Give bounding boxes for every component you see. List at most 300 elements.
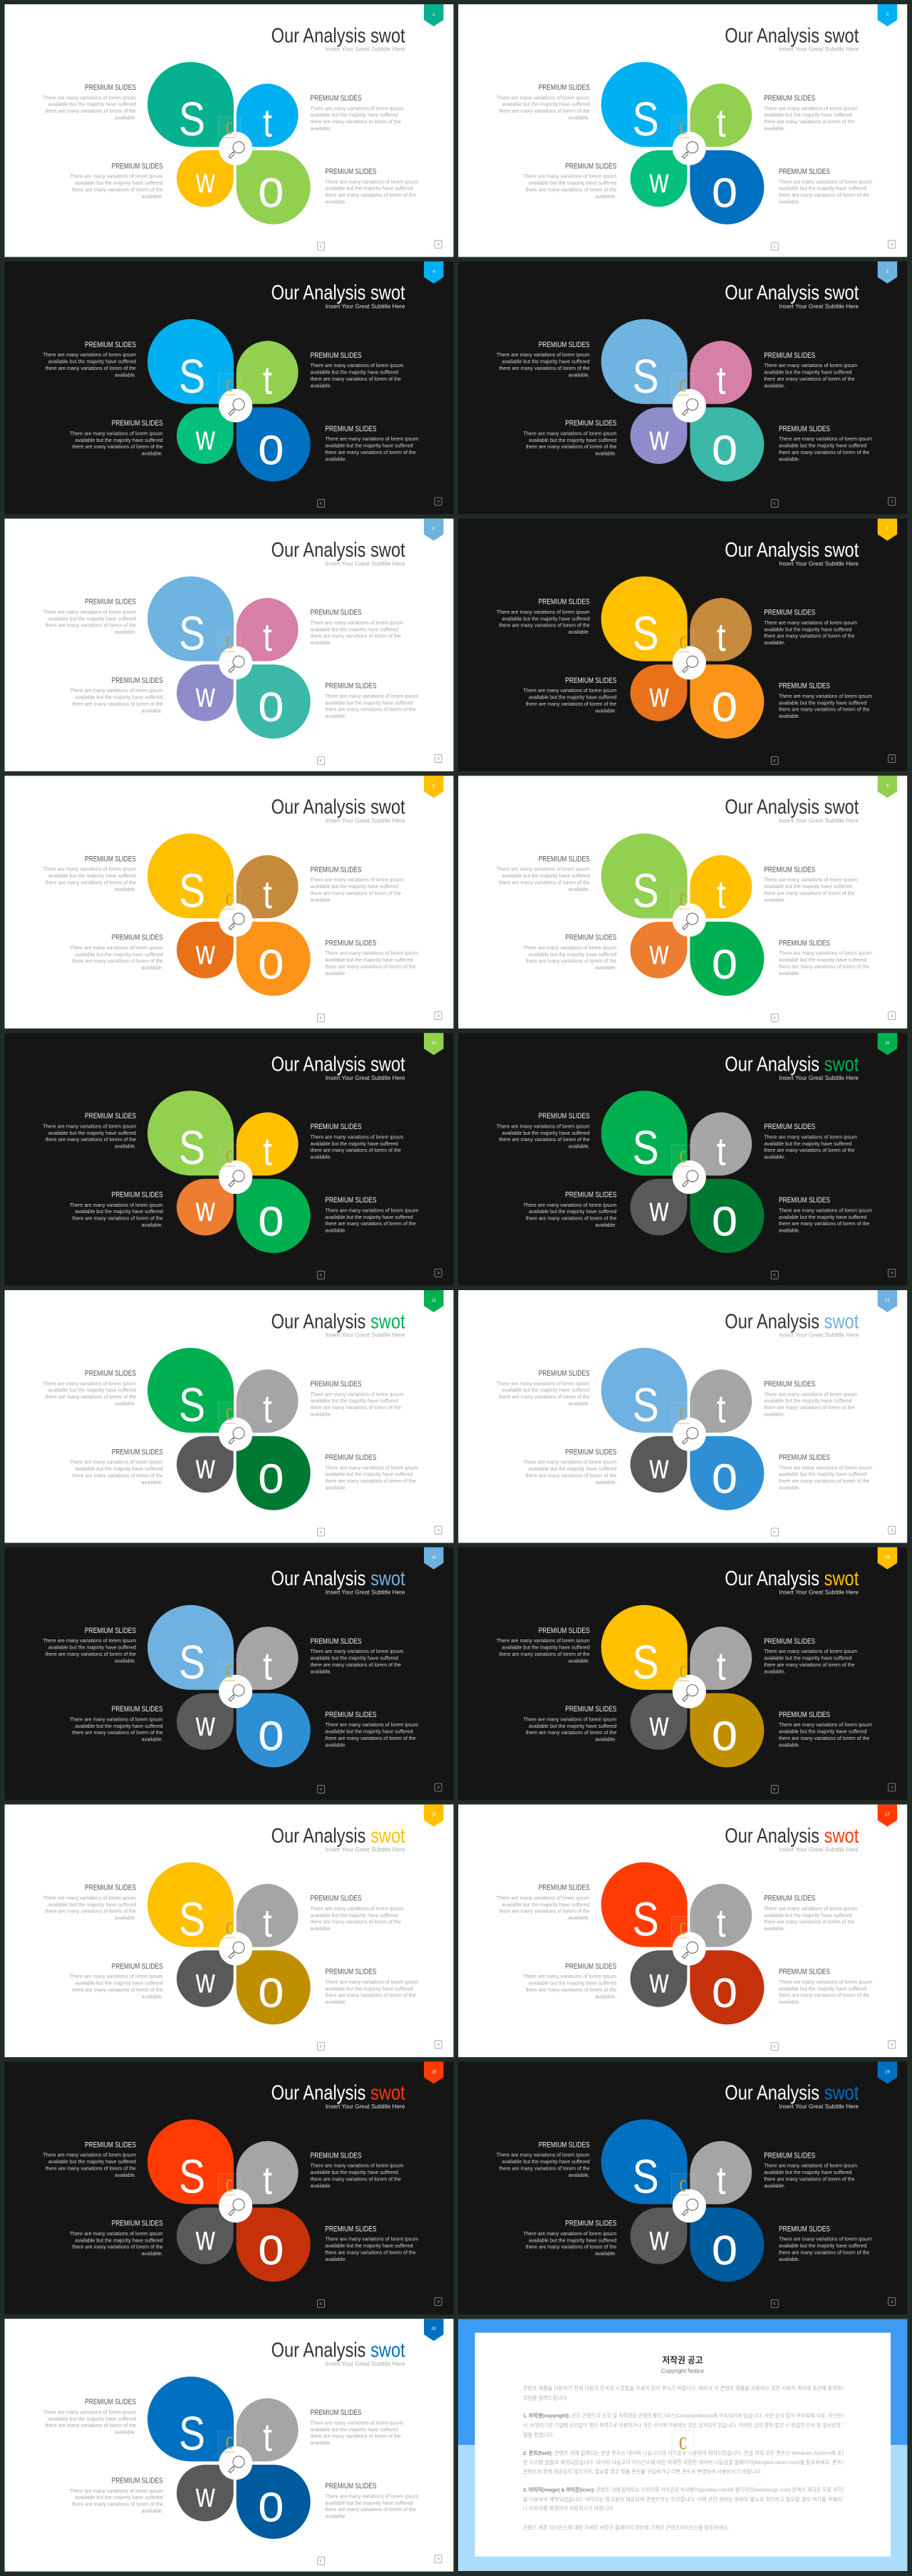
text block: top right <box>311 1637 403 1674</box>
text block: bottom right: PREMIUM SLIDES <box>325 1968 376 1977</box>
slide background <box>4 262 453 514</box>
petal t: t <box>263 100 272 145</box>
page tag: 15 <box>885 1556 890 1560</box>
text block: top left: PREMIUM SLIDES <box>85 1112 136 1120</box>
text block: bottom left: available but the majority have suffered <box>75 180 163 186</box>
text block: bottom left: there are many variations of lorem of the <box>72 187 163 192</box>
subtitle: Insert Your Great Subtitle Here <box>779 1590 859 1596</box>
text block: bottom left: There are many variations of lorem ipsum <box>523 1974 616 1979</box>
petal t <box>690 2141 752 2204</box>
text block: top left: available but the majority have suffered <box>48 359 136 364</box>
text block: bottom left <box>523 419 616 457</box>
petal w: w <box>649 163 669 200</box>
watermark <box>672 631 695 662</box>
text block: bottom right: There are many variations of lorem ipsum <box>779 179 872 185</box>
text block: top left: available. <box>569 1915 590 1921</box>
text block: bottom right: there are many variations of lorem of the <box>779 1993 869 1999</box>
nav next <box>435 755 442 763</box>
text block: bottom right <box>325 1968 418 2005</box>
watermark <box>672 2173 695 2205</box>
text block: top left: there are many variations of lorem of the <box>499 1909 590 1915</box>
text block: bottom right: available. <box>325 1485 346 1491</box>
text block: top right: available but the majority have suffered <box>311 1398 398 1404</box>
page tag: 5 <box>886 270 889 274</box>
text block: top right: available. <box>311 640 332 646</box>
text block: top left: available but the majority have suffered <box>48 616 136 622</box>
text block: top left: available but the majority have suffered <box>48 1645 136 1651</box>
petal w: w <box>649 676 669 715</box>
text block: top left: available but the majority have suffered <box>48 2159 136 2165</box>
text block: bottom right: PREMIUM SLIDES <box>779 1196 830 1205</box>
watermark: C <box>226 890 233 910</box>
page tag: 13 <box>885 1299 890 1303</box>
petal S <box>601 319 688 404</box>
text block: bottom right: PREMIUM SLIDES <box>325 939 376 947</box>
text block: bottom right: There are many variations of lorem ipsum <box>325 2237 418 2242</box>
nav previous <box>771 1271 778 1279</box>
watermark: C <box>226 1405 233 1424</box>
text block: bottom left: available. <box>142 194 163 200</box>
text block: top right: There are many variations of lorem ipsum <box>764 1649 857 1654</box>
text block: bottom left: There are many variations of lorem ipsum <box>523 2231 616 2237</box>
text block: bottom left: available but the majority have suffered <box>75 2495 163 2500</box>
subtitle: Insert Your Great Subtitle Here <box>326 46 405 53</box>
petal t <box>237 83 299 147</box>
watermark: C <box>680 119 687 138</box>
text block: bottom right <box>779 1453 872 1491</box>
petal S <box>601 1605 688 1690</box>
notice body text: 벌을 받습니다. <box>523 2431 554 2438</box>
petal w <box>177 408 234 464</box>
text block: bottom left: there are many variations of lorem of the <box>526 1987 616 1993</box>
text block: top left: There are many variations of lorem ipsum <box>43 1381 136 1386</box>
text block: top left: available. <box>115 887 136 892</box>
petal t: t <box>717 2158 726 2203</box>
text block: top left: available but the majority have suffered <box>502 873 590 879</box>
text block: top left: there are many variations of lorem of the <box>46 1137 136 1143</box>
text block: bottom left <box>70 1705 163 1743</box>
title: Our Analysis swot <box>271 2339 405 2361</box>
petal o: o <box>258 2216 284 2276</box>
text block: bottom right: there are many variations of lorem of the <box>325 2250 416 2255</box>
text block: top left <box>43 1627 136 1664</box>
center circle with magnifier <box>219 389 252 423</box>
text block: top left: PREMIUM SLIDES <box>85 341 136 349</box>
subtitle: Insert Your Great Subtitle Here <box>326 1846 405 1853</box>
text block: top left: there are many variations of lorem of the <box>46 2423 136 2428</box>
text block: bottom right: there are many variations of lorem of the <box>779 1736 869 1741</box>
petal w: w <box>649 1962 669 2001</box>
text block: top left: available but the majority have suffered <box>48 102 136 108</box>
slide background <box>4 1033 453 1286</box>
petal o: o <box>712 1445 737 1504</box>
text block: bottom right: PREMIUM SLIDES <box>779 682 830 691</box>
text block: top left: there are many variations of lorem of the <box>499 1652 590 1657</box>
page tag <box>424 1547 443 1570</box>
petal o <box>237 664 311 738</box>
petal w <box>631 664 687 721</box>
nav next <box>888 498 896 505</box>
slide background <box>458 1805 907 2057</box>
text block: top right: there are many variations of lorem of the <box>311 1148 401 1153</box>
subtitle: Insert Your Great Subtitle Here <box>326 1332 405 1339</box>
text block: top left: There are many variations of lorem ipsum <box>43 1895 136 1901</box>
text block: top right: PREMIUM SLIDES <box>311 1123 362 1131</box>
text block: bottom right: available. <box>325 713 346 719</box>
petal S: S <box>633 1379 659 1432</box>
text block: bottom left: there are many variations of lorem of the <box>526 2245 616 2250</box>
watermark: C <box>226 1920 233 1939</box>
notice body text: 3. 이미지(image) & 아이콘(icon): 콘텐츠 내에 탑재되는 이미지와 아이콘은 픽사베이(pixabay.com)와 웹디자인(webdesign.com) 등에서 제공된 무료 저작물 <box>523 2486 846 2493</box>
watermark <box>218 1659 241 1691</box>
text block: bottom left <box>70 1962 163 1999</box>
text block: top right: available. <box>764 1669 785 1674</box>
text block: bottom left: There are many variations of lorem ipsum <box>70 1716 163 1722</box>
petal w: w <box>195 1705 216 1743</box>
title: Our Analysis swot <box>725 1053 859 1076</box>
title: Our Analysis swot <box>271 24 405 47</box>
text block: bottom left: there are many variations of lorem of the <box>526 701 616 707</box>
slide 8 <box>4 776 453 1029</box>
text block: bottom right: available. <box>779 200 800 205</box>
subtitle: Insert Your Great Subtitle Here <box>779 818 859 824</box>
petal t: t <box>263 1386 272 1431</box>
text block: top left <box>497 1112 590 1150</box>
page tag: 18 <box>431 2070 437 2074</box>
text block: top left: available. <box>115 629 136 635</box>
text block: top right: There are many variations of lorem ipsum <box>764 1906 857 1912</box>
text block: bottom left: available. <box>595 965 616 971</box>
title: Our Analysis swot <box>271 1310 405 1333</box>
text block: top right: available but the majority have suffered <box>764 884 852 890</box>
text block: bottom left: available but the majority have suffered <box>529 438 616 443</box>
center circle with magnifier <box>673 903 706 937</box>
page tag <box>424 776 443 798</box>
text block: top left: There are many variations of lorem ipsum <box>497 1123 590 1129</box>
text block: bottom right: there are many variations of lorem of the <box>779 1478 869 1484</box>
slide background <box>458 4 907 257</box>
text block: bottom right <box>325 2225 418 2262</box>
text block: bottom left <box>70 1190 163 1228</box>
text block: bottom right: There are many variations of lorem ipsum <box>325 436 418 442</box>
text block: top right: there are many variations of lorem of the <box>311 2433 401 2439</box>
text block: top right: available but the majority have suffered <box>764 113 852 118</box>
petal w <box>177 2465 234 2521</box>
text block: bottom right: PREMIUM SLIDES <box>325 1196 376 1205</box>
petal w: w <box>649 1191 669 1229</box>
text block: bottom right: available but the majority have suffered <box>325 957 413 963</box>
text block: top left <box>43 2140 136 2178</box>
subtitle: Insert Your Great Subtitle Here <box>326 1590 405 1596</box>
text block: top left: available. <box>569 372 590 378</box>
text block: bottom right: available but the majority have suffered <box>779 443 866 448</box>
text block: top left: available but the majority have suffered <box>48 1130 136 1136</box>
text block: bottom right: there are many variations of lorem of the <box>779 707 869 713</box>
text block: top right: there are many variations of lorem of the <box>311 890 401 896</box>
title: Our Analysis swot <box>725 539 859 562</box>
petal t <box>690 341 752 404</box>
nav next <box>435 498 442 505</box>
center circle with magnifier <box>673 1932 706 1965</box>
text block: bottom left: there are many variations of lorem of the <box>72 2245 163 2250</box>
nav next <box>888 2298 896 2306</box>
petal w <box>177 1694 234 1750</box>
nav previous <box>318 242 325 250</box>
text block: top left: There are many variations of lorem ipsum <box>43 1638 136 1644</box>
text block: top right <box>764 865 857 903</box>
page tag: 10 <box>431 1041 437 1046</box>
text block: top left: available but the majority have suffered <box>502 1130 590 1136</box>
text block: bottom right: There are many variations of lorem ipsum <box>779 2237 872 2242</box>
nav next <box>435 2298 442 2306</box>
petal w <box>631 1436 687 1493</box>
center circle with magnifier <box>219 1932 252 1965</box>
notice background top <box>458 2319 908 2445</box>
watermark <box>672 1402 695 1433</box>
text block: top left: there are many variations of lorem of the <box>46 1909 136 1915</box>
slide background <box>4 4 453 257</box>
text block: top right: PREMIUM SLIDES <box>764 609 815 617</box>
text block: top left: there are many variations of lorem of the <box>499 1137 590 1143</box>
nav next <box>435 2041 442 2049</box>
watermark: CONTENTS <box>677 1679 689 1682</box>
text block: top left: PREMIUM SLIDES <box>85 1627 136 1635</box>
text block: bottom left: There are many variations of lorem ipsum <box>70 2488 163 2494</box>
text block: bottom left: available. <box>142 1480 163 1485</box>
text block: top right: There are many variations of lorem ipsum <box>764 105 857 111</box>
text block: bottom left: PREMIUM SLIDES <box>565 676 616 685</box>
text block: bottom right: PREMIUM SLIDES <box>779 168 830 176</box>
page tag: 14 <box>431 1556 437 1560</box>
text block: bottom left: There are many variations of lorem ipsum <box>523 1716 616 1722</box>
text block: bottom right: There are many variations of lorem ipsum <box>325 1722 418 1728</box>
text block: top right <box>311 1123 403 1160</box>
text block: bottom left: available but the majority have suffered <box>75 438 163 443</box>
panel: copyright notice <box>458 2319 908 2571</box>
slide background <box>458 776 907 1029</box>
watermark <box>672 1145 695 1176</box>
text block: bottom right <box>779 168 872 205</box>
text block: bottom right: PREMIUM SLIDES <box>779 1453 830 1462</box>
text block: bottom right: PREMIUM SLIDES <box>779 425 830 433</box>
text block: top left: There are many variations of lorem ipsum <box>43 867 136 872</box>
text block: bottom left: PREMIUM SLIDES <box>112 2220 163 2228</box>
text block: top right: available but the majority have suffered <box>311 2427 398 2433</box>
text block: top left: available. <box>569 1144 590 1150</box>
text block: bottom left: PREMIUM SLIDES <box>565 419 616 428</box>
petal o: o <box>258 1187 284 1247</box>
text block: bottom left: There are many variations of lorem ipsum <box>523 431 616 436</box>
text block: bottom left: There are many variations of lorem ipsum <box>70 1202 163 1208</box>
watermark: CONTENTS <box>677 2193 689 2196</box>
petal S: S <box>633 1636 659 1689</box>
text block: bottom left: available but the majority have suffered <box>75 1466 163 1472</box>
slide 16 <box>4 1805 453 2057</box>
text block: top right: There are many variations of lorem ipsum <box>764 1391 857 1397</box>
text block: top right: there are many variations of lorem of the <box>311 2176 401 2182</box>
title: Our Analysis swot <box>271 2082 405 2105</box>
nav previous <box>318 2557 325 2565</box>
title: Our Analysis swot <box>725 2082 859 2105</box>
text block: bottom left: available. <box>595 1737 616 1743</box>
petal o <box>237 1179 311 1253</box>
slide 7 <box>458 519 907 771</box>
title: Our Analysis swot <box>271 539 405 562</box>
text block: bottom left: PREMIUM SLIDES <box>112 162 163 170</box>
petal t: t <box>717 357 726 402</box>
text block: top right: There are many variations of lorem ipsum <box>764 620 857 626</box>
text block: bottom left <box>523 2220 616 2257</box>
text block: top left: There are many variations of lorem ipsum <box>43 609 136 615</box>
text block: bottom left <box>523 162 616 200</box>
text block: bottom left: There are many variations of lorem ipsum <box>70 431 163 436</box>
center circle with magnifier <box>673 646 706 679</box>
text block: bottom left: There are many variations of lorem ipsum <box>70 688 163 694</box>
text block: top right <box>764 1895 857 1932</box>
petal S: S <box>179 1379 205 1432</box>
text block: top left <box>497 855 590 892</box>
text block: bottom left: available. <box>142 2251 163 2257</box>
watermark <box>218 631 241 662</box>
watermark: CONTENTS <box>677 907 689 910</box>
subtitle: Insert Your Great Subtitle Here <box>326 303 405 309</box>
text block: bottom left: available. <box>595 194 616 200</box>
text block: top right: PREMIUM SLIDES <box>311 1637 362 1646</box>
petal w: w <box>195 419 216 458</box>
title: Our Analysis swot <box>725 796 859 819</box>
text block: top left: There are many variations of lorem ipsum <box>497 2153 590 2158</box>
title: Our Analysis swot <box>271 282 405 304</box>
petal w <box>177 1179 234 1235</box>
text block: bottom left: available. <box>142 1222 163 1228</box>
petal w: w <box>195 676 216 715</box>
text block: top left: available. <box>569 2173 590 2178</box>
text block: bottom left: there are many variations of lorem of the <box>72 1215 163 1221</box>
watermark: CONTENTS <box>224 1937 235 1939</box>
watermark: CONTENTS <box>224 2451 235 2453</box>
petal S <box>601 1863 688 1947</box>
watermark: CONTENTS <box>677 393 689 396</box>
notice body text: 콘텐츠와 함께 제공되지 않으므로, 필요할 경우 정품 폰트를 구입하거나 다른 폰트로 변경하여 사용하시기 바랍니다. <box>523 2468 762 2475</box>
petal o <box>237 2207 311 2282</box>
petal t <box>237 1627 299 1690</box>
watermark <box>672 116 695 148</box>
petal o: o <box>712 1187 737 1247</box>
petal w: w <box>649 2220 669 2258</box>
watermark: CONTENTS <box>677 1165 689 1168</box>
petal o <box>690 1694 764 1768</box>
text block: bottom left: available but the majority have suffered <box>529 1209 616 1215</box>
text block: top left: there are many variations of lorem of the <box>46 880 136 885</box>
text block: bottom right <box>325 1711 418 1748</box>
text block: top left: available. <box>569 1401 590 1407</box>
petal o <box>690 150 764 225</box>
nav previous <box>771 1786 778 1793</box>
text block: top right: There are many variations of lorem ipsum <box>311 877 403 883</box>
text block: top right: PREMIUM SLIDES <box>764 1123 815 1131</box>
petal w: w <box>195 2477 216 2515</box>
petal o <box>690 2207 764 2282</box>
petal S: S <box>633 607 659 661</box>
text block: top left <box>43 1112 136 1150</box>
text block: bottom right: PREMIUM SLIDES <box>779 2225 830 2233</box>
slide 11 <box>458 1033 907 1286</box>
text block: top right: there are many variations of lorem of the <box>764 376 855 382</box>
text block: bottom left <box>523 934 616 971</box>
text block: top right: available. <box>311 383 332 388</box>
petal o: o <box>712 673 737 733</box>
petal o <box>690 922 764 996</box>
text block: top left <box>43 1884 136 1921</box>
title: Our Analysis swot <box>725 282 859 304</box>
text block: top right: available but the majority have suffered <box>764 1398 852 1404</box>
slide background <box>458 1033 907 1286</box>
page tag <box>878 2061 897 2083</box>
slide 2 <box>4 4 453 257</box>
petal o: o <box>258 1959 284 2019</box>
slide 14 <box>4 1547 453 1800</box>
title: Our Analysis swot <box>725 1567 859 1590</box>
text block: top right: PREMIUM SLIDES <box>311 1895 362 1903</box>
nav previous <box>771 2299 778 2307</box>
text block: top left: there are many variations of lorem of the <box>499 880 590 885</box>
text block: bottom left: there are many variations of lorem of the <box>72 2501 163 2507</box>
watermark: C <box>226 1662 233 1681</box>
text block: bottom left: PREMIUM SLIDES <box>565 2220 616 2228</box>
text block: bottom right: there are many variations of lorem of the <box>779 192 869 198</box>
slide background <box>4 1805 453 2057</box>
text block: bottom left: available. <box>595 451 616 457</box>
text block: bottom right: there are many variations of lorem of the <box>325 192 416 198</box>
text block: bottom left: available. <box>595 2251 616 2257</box>
text block: bottom left: PREMIUM SLIDES <box>112 1448 163 1456</box>
text block: top right: available. <box>311 1669 332 1674</box>
text block: bottom left: PREMIUM SLIDES <box>565 934 616 942</box>
text block: bottom left <box>70 2476 163 2514</box>
text block: top left <box>497 598 590 635</box>
notice body text: 시, 비영리기관 기업에 상관없이 영리 목적으로 이용하거나 개인 사이에 이용하는 것은 금지되어 있습니다. 이러한 금지 행위 발견 시 준엄한 민사 및 형사상의 처 <box>523 2421 846 2428</box>
subtitle: Insert Your Great Subtitle Here <box>779 560 859 567</box>
slide background <box>458 2061 907 2314</box>
petal S: S <box>179 93 205 146</box>
petal w <box>631 150 687 207</box>
text block: bottom right: available but the majority have suffered <box>325 1986 413 1992</box>
text block: top right: available but the majority have suffered <box>311 627 398 632</box>
text block: bottom left: PREMIUM SLIDES <box>112 1705 163 1714</box>
text block: top right: available but the majority have suffered <box>311 1912 398 1918</box>
watermark: C <box>226 634 233 653</box>
text block: bottom right: there are many variations of lorem of the <box>325 1736 416 1741</box>
text block: bottom left: available. <box>595 1222 616 1228</box>
text block: top right: there are many variations of lorem of the <box>764 119 855 125</box>
watermark: CONTENTS <box>224 136 235 139</box>
center circle with magnifier <box>219 646 252 679</box>
watermark: CONTENTS <box>677 651 689 654</box>
text block: bottom right: there are many variations of lorem of the <box>325 1221 416 1227</box>
text block: top left: There are many variations of lorem ipsum <box>497 1895 590 1901</box>
text block: top left <box>43 855 136 892</box>
text block: bottom left: available but the majority have suffered <box>529 1466 616 1472</box>
text block: top left <box>43 83 136 121</box>
text block: top right <box>764 94 857 131</box>
watermark: CONTENTS <box>677 1937 689 1939</box>
text block: top left: available but the majority have suffered <box>502 1645 590 1651</box>
text block: bottom right: available. <box>779 1228 800 1234</box>
text block: top left: There are many variations of lorem ipsum <box>497 95 590 101</box>
watermark <box>218 116 241 148</box>
notice body text: 된 시스템 글꼴로 제작되었습니다. 네이버 나눔고딕 라이선스에 대한 자세한 사항은 네이버 나눔글꼴 홈페이지(hangeul.naver.com)를 참조하세요. 폰트는 <box>523 2458 846 2466</box>
nav previous <box>318 1786 325 1793</box>
